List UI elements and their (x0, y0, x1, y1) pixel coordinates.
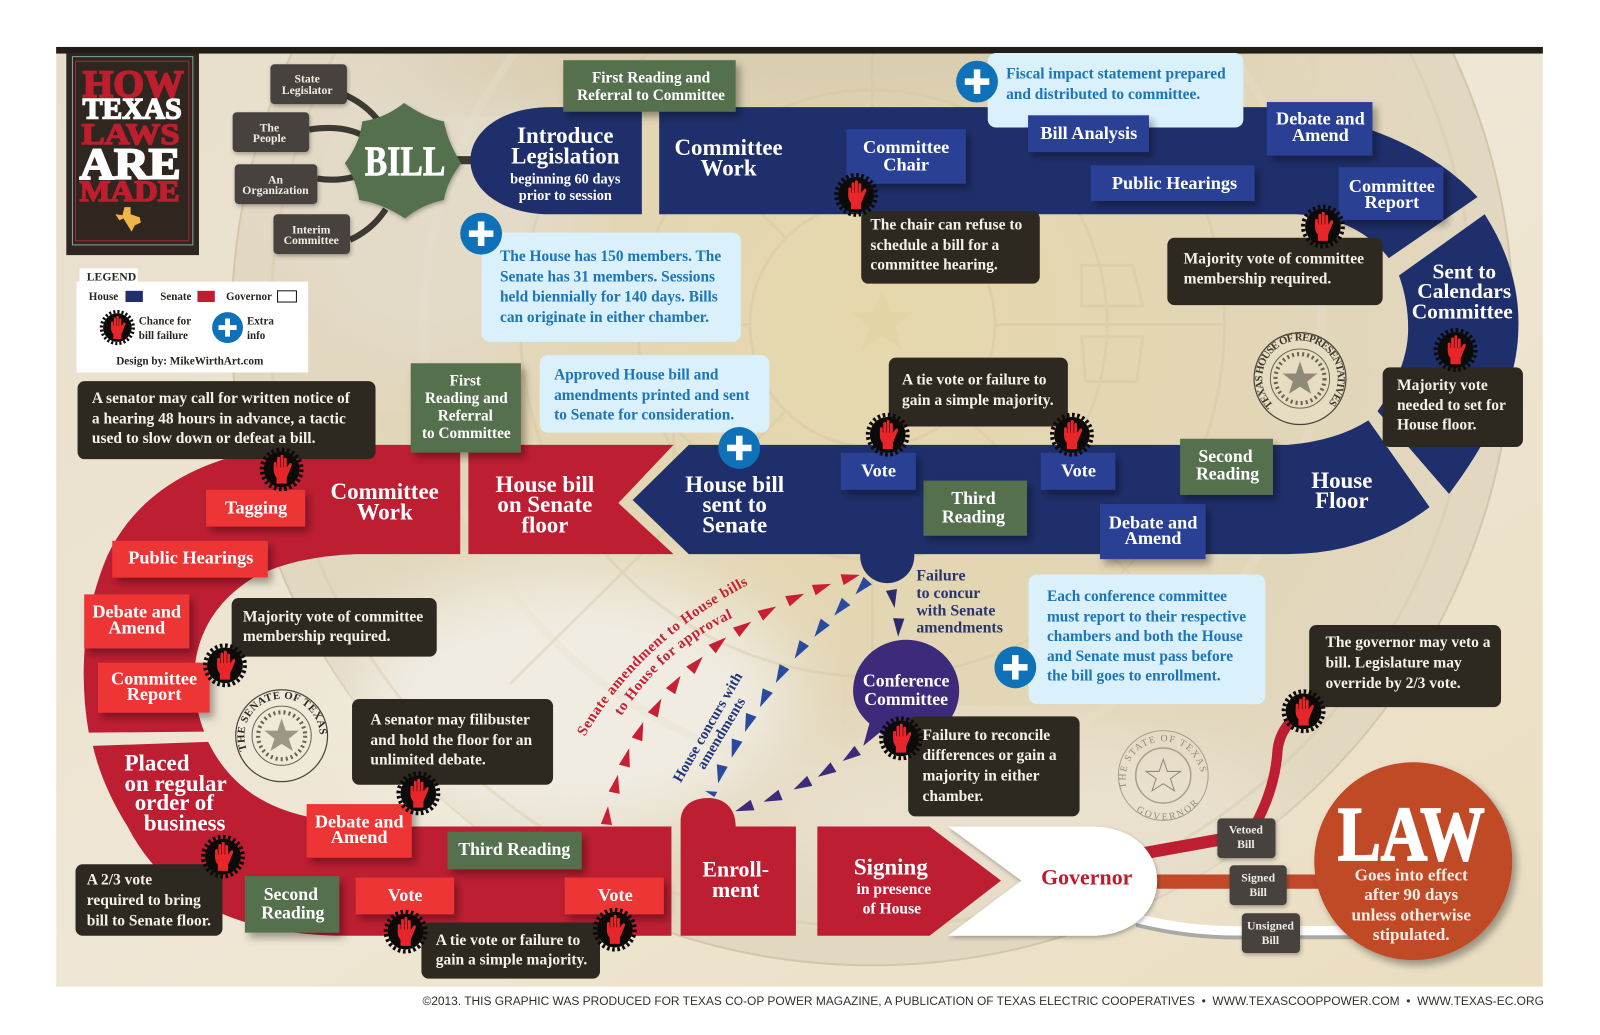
icon: failure hand veto (1284, 691, 1323, 731)
callout: filibuster: and hold the floor for an (370, 732, 533, 749)
arrows: senate amendment path (601, 569, 861, 825)
callout: chair can refuse: committee hearing. (870, 256, 998, 273)
law circle (1314, 762, 1512, 960)
conference committee: Committee (864, 689, 948, 709)
step: debate and amend house floor: Debate and (1109, 513, 1197, 533)
step: first reading and referral senate: Reading and (425, 390, 508, 407)
governor outcome lines (1137, 720, 1352, 935)
legend: Senate (160, 291, 192, 303)
legend: Extra (247, 315, 274, 327)
text: failure to concur: Failure (916, 568, 966, 585)
step: second reading senate: Reading (261, 902, 325, 922)
senate path: placed on regular order: order of (135, 790, 214, 815)
law circle: Goes into effect (1355, 866, 1468, 885)
step: vote house left (841, 453, 916, 490)
callout: failure to reconcile: majority in either (922, 768, 1040, 785)
step: third reading senate: Third Reading (458, 839, 570, 859)
callout: majority vote to set house floor (1383, 367, 1523, 447)
step: first reading and referral senate: to Committee (422, 425, 511, 442)
source: state legislator: State (294, 73, 320, 86)
source: the people: People (253, 132, 286, 145)
icon: plus fiscal info (956, 61, 998, 103)
callout: majority vote of committee house: Majority vote of committee (1184, 250, 1364, 267)
conference committee (853, 640, 959, 746)
step: first reading and referral senate: First (450, 373, 482, 390)
senate path: committee work: Work (357, 499, 413, 524)
info: fiscal impact (988, 53, 1243, 128)
icon: plus approved info (718, 427, 760, 469)
callout: tie vote house: gain a simple majority. (902, 392, 1054, 409)
callout: failure to reconcile: differences or gain a (922, 747, 1057, 764)
icon: plus conference info (994, 646, 1036, 688)
callout: governor veto: override by 2/3 vote. (1326, 675, 1461, 692)
step: bill analysis: Bill Analysis (1040, 123, 1137, 143)
step: first reading and referral top (563, 60, 736, 112)
info: house members: The House has 150 members. The (500, 248, 721, 265)
legend: Design by: MikeWirthArt.com (116, 355, 264, 367)
house path: house floor: Floor (1315, 488, 1369, 513)
step: debate and amend house committee: Debate and (1276, 108, 1365, 128)
callout: majority vote of committee senate: Majority vote of committee (243, 608, 423, 625)
step: vote senate right (565, 878, 664, 914)
bill badge (345, 103, 461, 218)
callout: majority vote of committee senate (232, 598, 437, 657)
source: interim committee: Interim (292, 224, 331, 237)
step: second reading senate: Second (264, 884, 318, 904)
callout: chair can refuse: schedule a bill for a (870, 237, 1000, 254)
vetoed bill (1217, 818, 1276, 858)
step: vote senate right: Vote (598, 885, 633, 905)
source: state legislator (270, 64, 347, 104)
callout: majority vote of committee house (1167, 238, 1383, 305)
callout: two thirds vote (76, 864, 222, 936)
step: debate and amend house committee: Amend (1292, 125, 1349, 145)
info: conference committee: must report to their respective (1047, 608, 1246, 625)
callout: two thirds vote: required to bring (87, 892, 201, 909)
arrows: failure to concur (886, 589, 904, 637)
step: debate and amend house committee (1267, 102, 1372, 156)
callout: tie vote senate (421, 922, 600, 979)
icon: texas star shape (115, 207, 141, 232)
step: third reading house (923, 481, 1027, 536)
text: failure to concur: to concur (916, 585, 980, 602)
callout: governor veto (1309, 625, 1501, 707)
callout: tie vote senate: gain a simple majority. (436, 951, 587, 968)
house path: introduce legislation (470, 107, 642, 214)
info: approved house bill (540, 355, 769, 433)
callout: tie vote house: A tie vote or failure to (902, 372, 1047, 389)
source: an organization: Organization (242, 184, 309, 197)
house path: house floor: sent to (703, 492, 767, 517)
house path: sent to calendars committee: Sent to (1432, 260, 1496, 284)
step: first reading and referral senate: Referral (438, 407, 493, 424)
step: public hearings house: Public Hearings (1112, 173, 1237, 193)
callout: written notice: a hearing 48 hours in advance, a tactic (92, 410, 346, 427)
source: state legislator: Legislator (282, 84, 333, 97)
senate path: placed on regular order: Placed (124, 750, 190, 775)
icon: failure hand vote right (1052, 415, 1092, 455)
footer credits: ©2013. THIS GRAPHIC WAS PRODUCED FOR TEXAS CO-OP POWER MAGAZINE, A PUBLICATION OF TEXAS ELECTRIC COOPERATIVES • WWW.TEXASCOOPPOWER.COM • WWW.TEXAS-EC.ORG (422, 994, 1544, 1008)
legend: bill failure (139, 330, 188, 342)
info: conference committee: and Senate must pass before (1047, 648, 1233, 665)
step: public hearings senate (112, 541, 268, 578)
callout: governor veto: The governor may veto a (1326, 634, 1491, 651)
text: senate amendment curve label: to House for approval (616, 608, 732, 715)
law circle: LAW (1338, 791, 1485, 877)
callout: written notice: used to slow down or defeat a bill. (92, 430, 316, 447)
conference committee: Conference (863, 671, 949, 691)
step: first reading and referral top: Referral to Committee (577, 87, 725, 104)
vetoed bill: Vetoed (1229, 824, 1263, 837)
icon: failure hand senate vote right (595, 910, 635, 949)
info: house members: Senate has 31 members. Sessions (500, 269, 715, 286)
bill sources connectors (309, 95, 476, 240)
callout: written notice: A senator may call for written notice of (92, 390, 351, 407)
house path: introduce legislation: beginning 60 days (510, 172, 621, 188)
icon: failure hand vote left (868, 415, 908, 455)
info: approved house bill: amendments printed and sent (554, 387, 750, 404)
step: bill analysis (1028, 115, 1149, 152)
senate path: placed on regular order: business (144, 811, 226, 836)
info: house members: held biennially for 140 days. Bills (500, 289, 718, 306)
top bar (56, 47, 1543, 54)
house path: introduce legislation: prior to session (519, 188, 612, 204)
seal: texas house of representatives: TEXAS HOUSE OF REPRESENTATIVES (1255, 334, 1345, 410)
icon: failure hand senate floor (203, 837, 243, 877)
unsigned bill: Unsigned (1247, 920, 1294, 933)
house path: introduce legislation: Introduce (517, 123, 614, 148)
source: the people (233, 112, 309, 152)
step: second reading house: Reading (1196, 464, 1259, 484)
law circle: after 90 days (1364, 885, 1458, 904)
title block (66, 53, 199, 255)
step: vote senate left: Vote (388, 885, 423, 905)
enrollment: ment (712, 877, 760, 902)
step: tagging: Tagging (225, 497, 287, 517)
signed bill: Bill (1249, 886, 1268, 899)
unsigned bill (1242, 913, 1300, 953)
legend: Chance for (139, 315, 191, 327)
callout: two thirds vote: bill to Senate floor. (87, 913, 211, 930)
step: second reading house (1180, 439, 1273, 495)
governor: Governor (1041, 865, 1133, 890)
senate path: house bill on senate floor: House bill (495, 472, 594, 497)
law circle: unless otherwise (1352, 905, 1471, 924)
arrows: conference to enrollment path (733, 746, 861, 817)
callout: chair can refuse (861, 211, 1040, 284)
step: committee report senate: Report (127, 684, 181, 704)
enrollment: Enroll- (702, 857, 769, 882)
callout: two thirds vote: A 2/3 vote (87, 872, 152, 889)
signing arrow (817, 827, 1001, 936)
house path: house floor: House (1311, 468, 1372, 493)
unsigned bill: Bill (1262, 934, 1280, 947)
title block: ARE (80, 139, 181, 189)
step: third reading senate (447, 832, 582, 869)
step: tagging (206, 490, 305, 527)
callout: chair can refuse: The chair can refuse to (870, 217, 1022, 234)
info: approved house bill: Approved House bill and (554, 367, 719, 384)
seal: governor: GOVERNOR (1138, 800, 1198, 820)
title block: MADE (80, 176, 180, 208)
icon: failure hand calendars (1436, 330, 1476, 370)
callout: failure to reconcile: Failure to reconcile (922, 727, 1050, 744)
callout: filibuster: A senator may filibuster (370, 711, 530, 728)
icon: failure hand tagging (262, 449, 302, 489)
source: an organization: An (268, 174, 283, 187)
signing arrow: Signing (854, 854, 928, 879)
house path: committee work: Committee (674, 135, 783, 160)
info: house members: can originate in either chamber. (500, 309, 709, 326)
info: fiscal impact: Fiscal impact statement prepared (1006, 66, 1226, 83)
seal: governor: THE STATE OF TEXAS (1119, 734, 1206, 789)
text: senate amendment curve label: Senate amendment to House bills (578, 579, 748, 736)
step: committee report senate: Committee (111, 669, 197, 689)
step: committee chair: Committee (863, 137, 949, 157)
info: conference committee (1029, 574, 1265, 704)
step: second reading senate (245, 876, 339, 933)
text: failure to concur: amendments (916, 620, 1003, 637)
info: house members (482, 233, 741, 342)
step: public hearings house (1091, 165, 1255, 201)
step: committee chair (846, 129, 966, 184)
step: debate and amend senate committee (84, 594, 189, 648)
callout: majority vote of committee senate: membership required. (243, 628, 391, 645)
step: vote house right: Vote (1061, 461, 1096, 481)
signed bill (1230, 865, 1287, 905)
signing arrow: in presence (857, 881, 931, 898)
step: committee report house (1339, 167, 1443, 220)
enrollment (681, 798, 796, 936)
legend: info (247, 330, 266, 342)
governor (948, 827, 1157, 936)
senate path: placed on regular order (93, 742, 671, 936)
info: conference committee: Each conference committee (1047, 588, 1227, 605)
icon: legend hand (101, 312, 133, 343)
icon: failure hand committee report (1303, 207, 1343, 246)
callout: tie vote house (889, 358, 1068, 427)
signed bill: Signed (1241, 872, 1276, 885)
info: approved house bill: to Senate for consideration. (554, 406, 734, 423)
step: debate and amend senate committee: Amend (108, 618, 165, 638)
house path: introduce legislation: Legislation (511, 143, 620, 168)
legend (77, 268, 308, 372)
info: conference committee: the bill goes to enrollment. (1047, 668, 1221, 685)
house path: house floor: Senate (702, 513, 767, 538)
senate path: house bill on senate floor: floor (521, 513, 568, 538)
bill badge: BILL (365, 140, 445, 186)
callout: filibuster (352, 699, 553, 785)
icon: failure hand senate vote left (386, 912, 426, 952)
legend: House (89, 291, 118, 303)
step: public hearings senate: Public Hearings (128, 547, 253, 567)
step: vote senate left (356, 878, 454, 914)
step: vote house right (1041, 453, 1115, 490)
callout: failure to reconcile: chamber. (922, 788, 984, 805)
callout: written notice (78, 381, 376, 459)
step: debate and amend senate committee: Debate and (92, 601, 181, 621)
title block: HOW (83, 63, 184, 106)
seal: senate of texas (235, 689, 328, 782)
step: committee chair: Chair (883, 154, 929, 174)
source: the people: The (260, 122, 279, 135)
law circle: stipulated. (1373, 925, 1450, 944)
source: interim committee (273, 214, 350, 254)
source: interim committee: Committee (284, 234, 339, 247)
house path: sent to calendars committee (1378, 214, 1518, 494)
house path: house floor (633, 420, 1430, 583)
step: first reading and referral top: First Reading and (592, 70, 711, 87)
info: fiscal impact: and distributed to committee. (1006, 86, 1200, 103)
senate path: committee work (84, 445, 460, 733)
house path: house floor: House bill (685, 472, 784, 497)
text: house concurs label: amendments (694, 695, 749, 772)
house path: committee work (659, 107, 1478, 258)
seal: governor (1118, 730, 1209, 821)
step: debate and amend house floor (1100, 504, 1206, 559)
text: house concurs label: House concurs with (670, 670, 746, 785)
step: vote house left: Vote (861, 461, 896, 481)
callout: majority vote to set house floor: needed to set for (1397, 397, 1506, 414)
callout: majority vote to set house floor: House floor. (1397, 417, 1477, 434)
seal: senate of texas: THE SENATE OF TEXAS (237, 692, 327, 752)
source: an organization (235, 164, 317, 204)
step: debate and amend senate floor: Amend (331, 827, 388, 847)
title block: LAWS (82, 119, 180, 151)
step: committee report senate (98, 663, 210, 713)
callout: filibuster: unlimited debate. (370, 751, 486, 768)
legend: Governor (226, 291, 272, 303)
step: committee report house: Committee (1349, 176, 1435, 196)
callout: governor veto: bill. Legislature may (1326, 654, 1462, 671)
house path: committee work: Work (701, 156, 757, 181)
icon: failure hand filibuster (398, 773, 438, 813)
text: failure to concur: with Senate (916, 602, 995, 619)
step: third reading house: Reading (942, 506, 1005, 526)
callout: failure to reconcile (908, 716, 1080, 816)
house path: sent to calendars committee: Committee (1412, 299, 1513, 323)
step: third reading house: Third (951, 488, 996, 508)
step: debate and amend senate floor (307, 804, 412, 858)
senate path: committee work: Committee (331, 479, 439, 504)
step: debate and amend house floor: Amend (1125, 528, 1181, 548)
info: conference committee: chambers and both the House (1047, 628, 1243, 645)
step: committee report house: Report (1364, 192, 1419, 212)
icon: legend plus (212, 312, 243, 343)
callout: majority vote of committee house: membership required. (1184, 271, 1331, 288)
title block: TEXAS (83, 93, 182, 125)
step: debate and amend senate floor: Debate and (315, 812, 404, 832)
house path: sent to calendars committee: Calendars (1417, 279, 1511, 303)
arrows: house concurs path (705, 577, 872, 797)
step: second reading house: Second (1198, 446, 1253, 466)
vetoed bill: Bill (1237, 838, 1255, 851)
signing arrow: of House (863, 900, 921, 917)
icon: plus house info (460, 213, 502, 255)
senate path: placed on regular order: on regular (124, 771, 227, 796)
callout: majority vote to set house floor: Majority vote (1397, 377, 1488, 394)
legend: LEGEND (87, 271, 136, 284)
step: first reading and referral senate (411, 363, 521, 453)
senate path: house bill on senate floor (468, 445, 673, 554)
senate path: house bill on senate floor: on Senate (497, 492, 592, 517)
icon: failure hand conference (881, 718, 921, 758)
icon: failure hand committee chair (836, 175, 876, 215)
callout: tie vote senate: A tie vote or failure to (436, 932, 580, 949)
icon: failure hand senate report (205, 645, 245, 685)
